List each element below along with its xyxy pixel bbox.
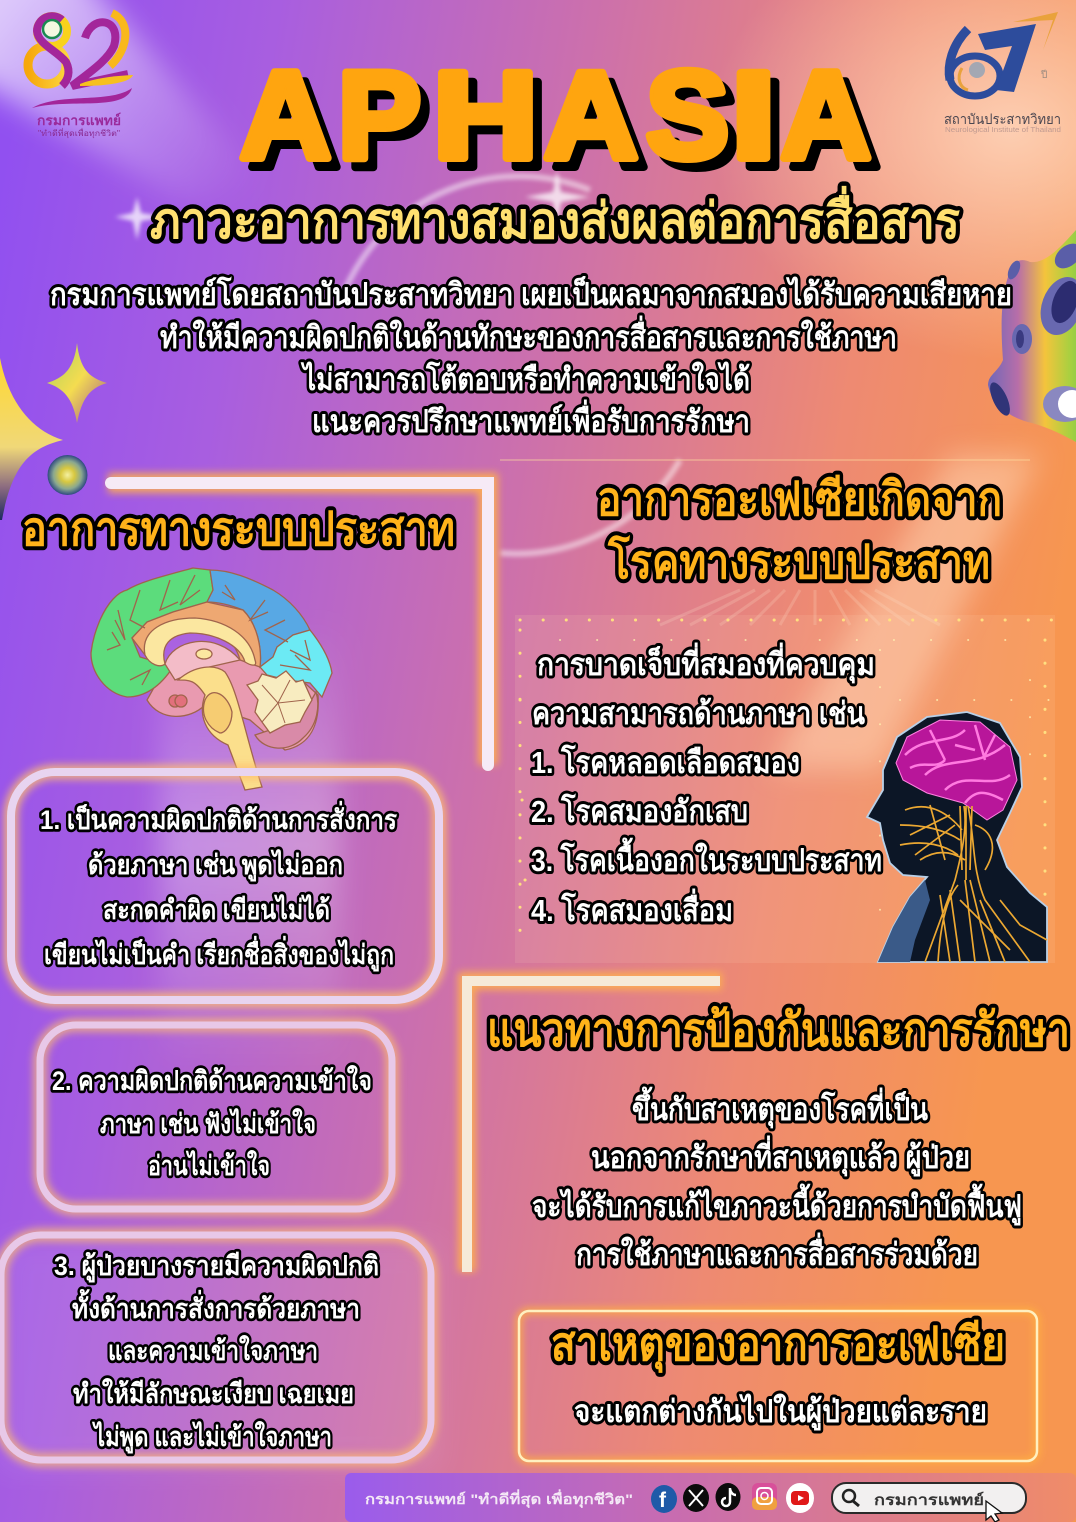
panel: neurological diseases: 4. โรคสมองเสื่อม (531, 888, 733, 928)
panel: neurological diseases: การบาดเจ็บที่สมองที่ควบคุม (537, 642, 875, 684)
brain folds (107, 575, 310, 685)
logo text: english name: Neurological Institute of Thailand (945, 127, 1061, 134)
footer bar (345, 1473, 1076, 1522)
panel: neurological diseases: 2. โรคสมองอักเสบ (531, 793, 748, 829)
text: treatment details (532, 1086, 1022, 1272)
logo text: department name: กรมการแพทย์ (37, 112, 121, 128)
panel: symptom 1 (11, 772, 439, 1000)
search box: กรมการแพทย์ (874, 1491, 984, 1509)
intro text: ทำให้มีความผิดปกติในด้านทักษะของการสื่อสารและการใช้ภาษา (160, 315, 897, 355)
illustration: head with glowing nerves (867, 712, 1047, 962)
title: I (731, 47, 776, 185)
panel: symptom 3: 3. ผู้ป่วยบางรายมีความผิดปกติ (54, 1251, 379, 1283)
text: treatment details: การใช้ภาษาและการสื่อสารร่วมด้วย (576, 1232, 978, 1272)
intro text: แนะควรปรึกษาแพทย์เพื่อรับการรักษา (312, 399, 750, 439)
heading: causes of aphasia (597, 472, 1002, 588)
title: A (249, 56, 340, 194)
title: S (646, 47, 729, 185)
logo text: institute name: สถาบันประสาทวิทยา (944, 111, 1061, 127)
logo text: slogan: "ทำดีที่สุดเพื่อทุกชีวิต" (38, 127, 120, 138)
logo: neurological institute 67 years (944, 12, 1061, 134)
title: I (740, 56, 785, 194)
panel: symptom 2: 2. ความผิดปกติด้านความเข้าใจ (52, 1065, 372, 1096)
panel: symptom 2 (40, 1025, 392, 1209)
title: H (442, 56, 547, 194)
intro text (50, 275, 1012, 439)
panel: causes vary (519, 1311, 1037, 1461)
panel: symptom 3: และความเข้าใจภาษา (108, 1335, 318, 1366)
icon: facebook: f (659, 1489, 667, 1512)
panel: neurological diseases: ความสามารถด้านภาษา เช่น (532, 696, 865, 731)
title: A (544, 47, 638, 185)
icon: youtube (786, 1483, 814, 1513)
search box (832, 1483, 1026, 1522)
heading: neurological symptoms: อาการทางระบบประสาท (22, 502, 455, 555)
panel: symptom 3 (1, 1235, 431, 1460)
panel: neurological diseases (515, 590, 1055, 963)
icon: x (683, 1484, 709, 1512)
panel: symptom 1: 1. เป็นความผิดปกติด้านการสั่งการ (40, 800, 397, 835)
text: treatment details: นอกจากรักษาที่สาเหตุแล้ว ผู้ป่วย (591, 1135, 970, 1177)
footer slogan: กรมการแพทย์ "ทำดีที่สุด เพื่อทุกชีวิต" (365, 1489, 633, 1508)
panel: symptom 3: ทั้งด้านการสั่งการด้วยภาษา (72, 1288, 360, 1324)
panel: neurological diseases: 3. โรคเนื้องอกในระบบประสาท (531, 837, 882, 878)
title (240, 47, 880, 194)
illustration: brain cross-section (91, 568, 332, 790)
panel: symptom 3: ไม่พูด และไม่เข้าใจภาษา (92, 1421, 332, 1454)
bracket line: neurological symptoms (108, 483, 488, 765)
title: A (553, 56, 647, 194)
panel: symptom 2: ภาษา เช่น ฟังไม่เข้าใจ (100, 1108, 316, 1139)
subtitle: ภาวะอาการทางสมองส่งผลต่อการสื่อสาร (150, 186, 960, 249)
intro text: ไม่สามารถโต้ตอบหรือทำความเข้าใจได้ (300, 361, 750, 397)
title: P (338, 47, 421, 185)
decoration: ball (48, 455, 88, 495)
panel: symptom 1: เขียนไม่เป็นคำ เรียกชื่อสิ่งของไม่ถูก (44, 935, 394, 972)
decoration: small star (47, 343, 107, 423)
title: A (781, 47, 871, 185)
bracket line: prevention (467, 981, 722, 1272)
title: H (433, 47, 538, 185)
logo: department 82 years (28, 13, 133, 138)
panel: neurological diseases: 1. โรคหลอดเลือดสมอง (531, 744, 800, 780)
icon: tiktok (716, 1483, 740, 1511)
text: treatment details: ขึ้นกับสาเหตุของโรคที่เป็น (632, 1086, 928, 1129)
decoration: virus sphere (986, 230, 1076, 442)
logo text: year mark: ปี (1040, 69, 1047, 81)
title: S (655, 56, 738, 194)
panel: symptom 1: ด้วยภาษา เช่น พูดไม่ออก (88, 849, 343, 882)
decoration: large star (0, 358, 63, 520)
panel: causes vary: สาเหตุของอาการอะเฟเซีย (551, 1317, 1005, 1373)
title: A (790, 56, 880, 194)
icon: instagram (752, 1483, 777, 1510)
panel: symptom 3: ทำให้มีลักษณะเงียบ เฉยเมย (73, 1378, 354, 1409)
panel: symptom 2: อ่านไม่เข้าใจ (148, 1150, 270, 1181)
title: A (240, 47, 331, 185)
panel: causes vary: จะแตกต่างกันไปในผู้ป่วยแต่ละราย (574, 1393, 987, 1431)
heading: causes of aphasia: อาการอะเฟเซียเกิดจาก (597, 472, 1002, 525)
panel: symptom 1: สะกดคำผิด เขียนไม่ได้ (103, 894, 330, 925)
heading: causes of aphasia: โรคทางระบบประสาท (607, 534, 990, 588)
icon: facebook (651, 1485, 677, 1513)
title: P (347, 56, 430, 194)
